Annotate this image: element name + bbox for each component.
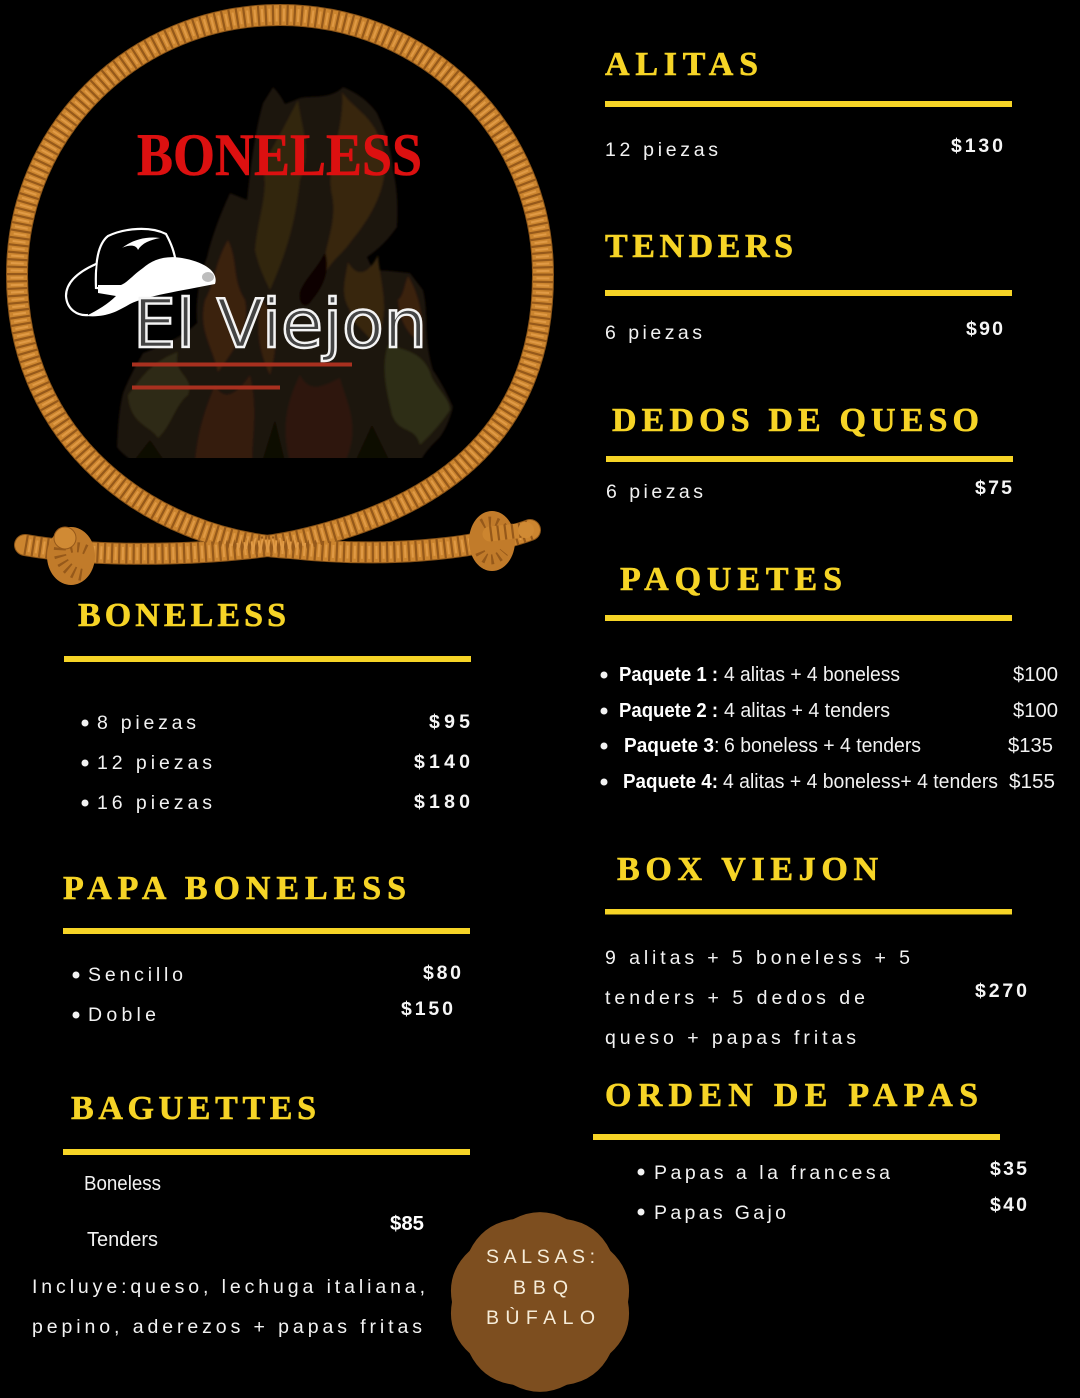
row: paquete 3: : xyxy=(714,735,720,757)
row: sencillo xyxy=(72,962,461,986)
heading: dedos de queso: DEDOS DE QUESO xyxy=(612,402,979,439)
panel: alitas xyxy=(605,46,1012,161)
panel: tenders xyxy=(605,228,1012,344)
logo word: El Viejon: El Viejon xyxy=(133,285,427,363)
logo word: BONELESS: BONELESS xyxy=(137,122,422,188)
panel: box viejon xyxy=(605,851,1027,1049)
row: paquete 4: $155 xyxy=(1009,771,1055,793)
row: papas gajo xyxy=(638,1194,1027,1224)
item: tenders: Tenders xyxy=(87,1229,158,1251)
item: 6 piezas: 6 piezas xyxy=(605,322,702,344)
panel: dedos de queso xyxy=(606,402,1013,503)
row: sencillo: Sencillo xyxy=(88,964,183,986)
row: paquete 1: 4 alitas + 4 boneless xyxy=(724,664,900,686)
icon: cowboy hat xyxy=(66,229,216,316)
description: box contents: tenders + 5 dedos de xyxy=(605,987,865,1009)
row: 16 piezas: $180 xyxy=(414,791,470,813)
badge: salsas xyxy=(451,1212,629,1392)
lasso rope xyxy=(17,15,543,554)
row: 16 piezas xyxy=(82,791,470,814)
price: 85: $85 xyxy=(390,1213,424,1235)
row: 16 piezas: 16 piezas xyxy=(97,792,212,814)
row: paquete 4: 4 alitas + 4 boneless+ 4 tenders xyxy=(723,771,998,793)
row: 12 piezas xyxy=(82,751,470,774)
panel: papa boneless xyxy=(63,870,470,1026)
heading: box viejon: BOX VIEJON xyxy=(617,851,878,888)
row: 8 piezas: $95 xyxy=(429,711,470,733)
badge: salsas: BBQ xyxy=(513,1277,568,1299)
logo red underlines xyxy=(132,362,352,390)
panel: boneless xyxy=(64,597,471,814)
row: paquete 2 xyxy=(600,700,1058,722)
logo: lasso with flames, Boneless and El Viejon xyxy=(17,15,543,585)
row: paquete 4: Paquete 4: xyxy=(623,771,718,793)
item: 12 piezas: 12 piezas xyxy=(605,139,718,161)
price: 75: $75 xyxy=(975,477,1012,499)
description: box contents: queso + papas fritas xyxy=(605,1027,856,1049)
row: paquete 1 xyxy=(600,664,1058,686)
item: boneless: Boneless xyxy=(84,1173,161,1195)
panel: paquetes xyxy=(600,561,1058,793)
price: 130: $130 xyxy=(951,135,1003,157)
row: doble xyxy=(72,998,453,1026)
row: paquete 3: Paquete 3 xyxy=(624,735,714,757)
heading: tenders: TENDERS xyxy=(605,228,793,265)
heading: boneless: BONELESS xyxy=(78,597,286,634)
heading: orden de papas: ORDEN DE PAPAS xyxy=(605,1077,978,1114)
description: box contents xyxy=(605,947,910,1049)
price: 270: $270 xyxy=(975,980,1027,1002)
row: 8 piezas xyxy=(82,711,470,734)
item: 6 piezas: 6 piezas xyxy=(606,481,703,503)
row: 12 piezas: 12 piezas xyxy=(97,752,212,774)
row: doble: $150 xyxy=(401,998,453,1020)
row: paquete 1: $100 xyxy=(1013,664,1058,686)
row: 8 piezas: 8 piezas xyxy=(97,712,196,734)
heading: alitas: ALITAS xyxy=(605,46,758,83)
description: includes: pepino, aderezos + papas fritas xyxy=(32,1316,422,1338)
row: 12 piezas: $140 xyxy=(414,751,470,773)
heading: baguettes: BAGUETTES xyxy=(71,1090,316,1127)
row: papas gajo: Papas Gajo xyxy=(654,1202,786,1224)
row: papas gajo: $40 xyxy=(990,1194,1027,1216)
heading: papa boneless: PAPA BONELESS xyxy=(63,870,406,907)
row: paquete 4 xyxy=(600,771,1055,793)
row: paquete 2: $100 xyxy=(1013,700,1058,722)
description: box contents: 9 alitas + 5 boneless + 5 xyxy=(605,947,910,969)
row: sencillo: $80 xyxy=(423,962,461,984)
row: papas a la francesa: $35 xyxy=(990,1158,1027,1180)
row: papas a la francesa: Papas a la francesa xyxy=(654,1162,890,1184)
heading: paquetes: PAQUETES xyxy=(620,561,842,598)
row: papas a la francesa xyxy=(638,1158,1027,1184)
left rope knot xyxy=(47,527,95,585)
badge: salsas: SALSAS: xyxy=(486,1246,595,1268)
description: includes: Incluye:queso, lechuga italiana, xyxy=(32,1276,425,1298)
row: paquete 2: Paquete 2 : xyxy=(619,700,718,722)
row: paquete 3: 6 boneless + 4 tenders xyxy=(724,735,921,757)
price: 90: $90 xyxy=(966,318,1003,340)
panel: orden de papas xyxy=(593,1077,1027,1224)
row: doble: Doble xyxy=(88,1004,156,1026)
description: includes xyxy=(32,1276,425,1338)
row: paquete 1: Paquete 1 : xyxy=(619,664,718,686)
row: paquete 3: $135 xyxy=(1008,735,1053,757)
badge: salsas: BÙFALO xyxy=(486,1306,595,1329)
flames xyxy=(117,87,453,462)
row: paquete 2: 4 alitas + 4 tenders xyxy=(724,700,890,722)
row: paquete 3 xyxy=(600,735,1053,757)
right rope knot xyxy=(469,511,534,571)
panel: baguettes xyxy=(32,1090,470,1338)
